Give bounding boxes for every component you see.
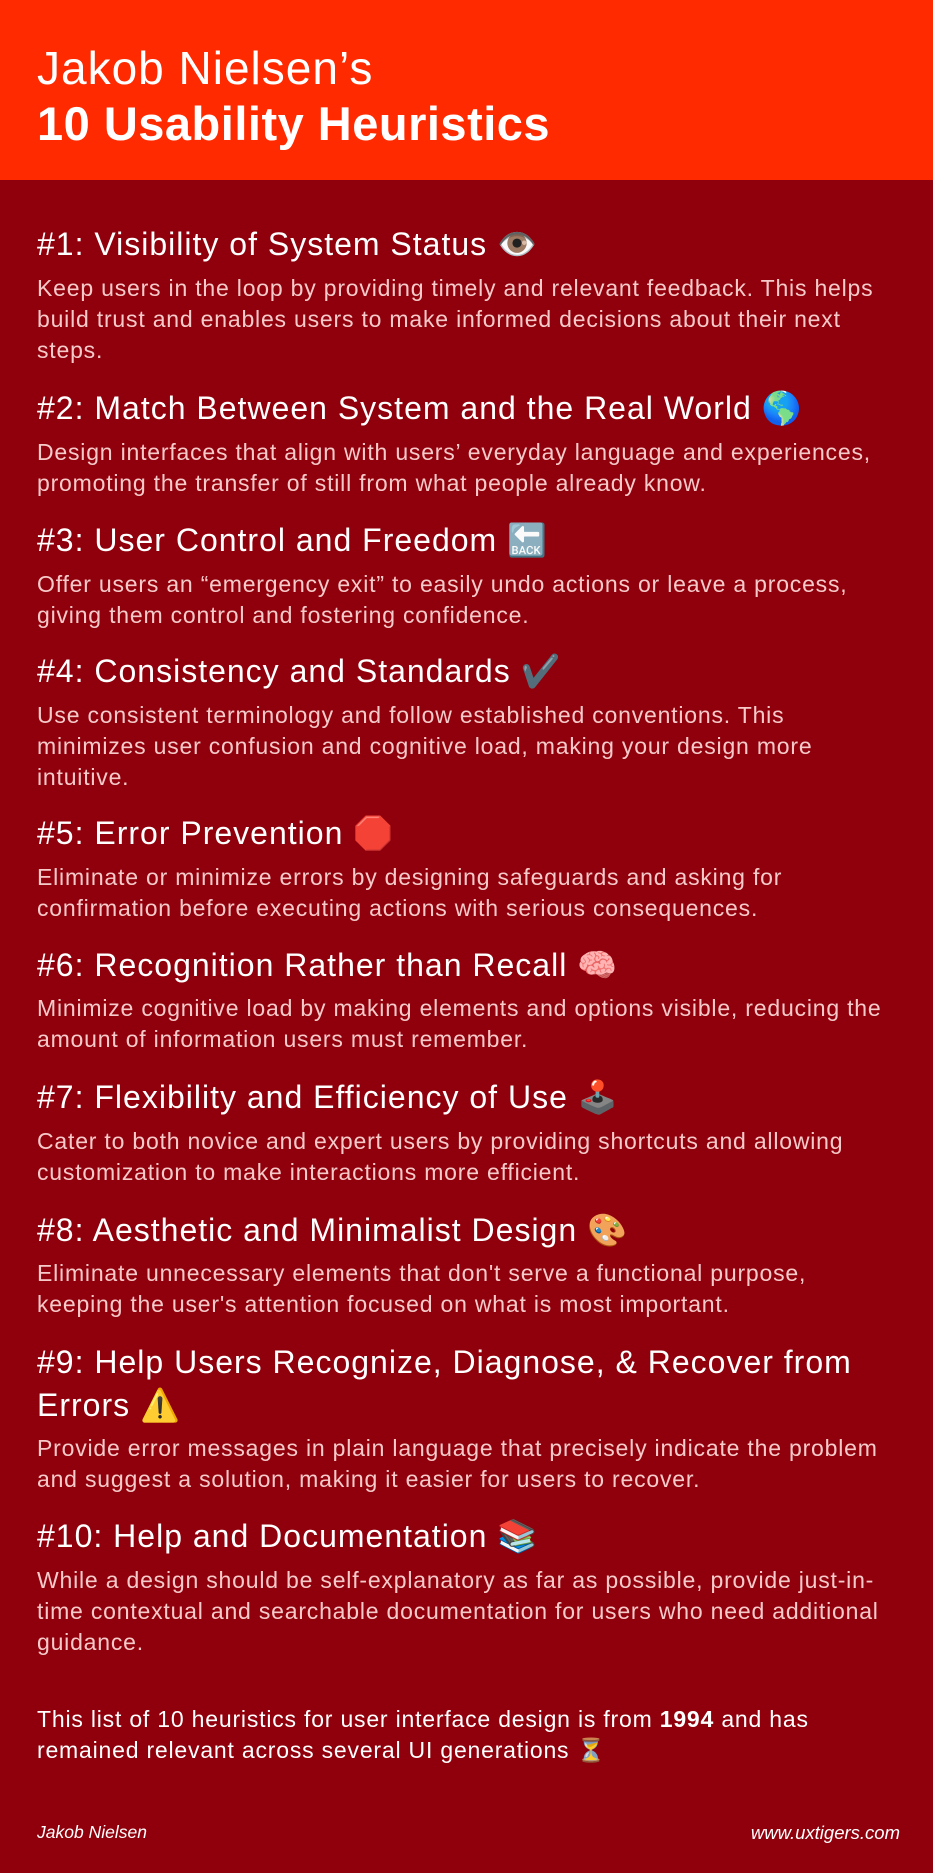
heuristic 4 (37, 653, 812, 790)
heuristic 1: build trust and enables users to make informed decisions about their next (37, 306, 841, 332)
heuristic 10: guidance. (37, 1629, 144, 1655)
heuristic 5 (37, 815, 782, 921)
heuristic 6: Minimize cognitive load by making elements and options visible, reducing the (37, 995, 882, 1021)
heuristic 1: steps. (37, 337, 103, 363)
heuristic 10 (37, 1518, 879, 1655)
footnote: This list of 10 heuristics for user interface design is from 1994 and has (37, 1706, 809, 1732)
heuristic 7: #7: Flexibility and Efficiency of Use 🕹️ (37, 1079, 619, 1115)
heuristic 10: time contextual and searchable documentation for users who need additional (37, 1598, 879, 1624)
heuristic 7: customization to make interactions more efficient. (37, 1159, 580, 1185)
heuristic 7 (37, 1079, 843, 1185)
heuristic 3: Offer users an “emergency exit” to easily undo actions or leave a process, (37, 571, 847, 597)
heuristic 8: keeping the user's attention focused on what is most important. (37, 1291, 730, 1317)
heuristic 5: #5: Error Prevention 🛑 (37, 815, 394, 851)
heuristic 3: giving them control and fostering confidence. (37, 602, 529, 628)
heuristic 1: #1: Visibility of System Status 👁️ (37, 226, 538, 262)
heuristic 10: While a design should be self-explanatory as far as possible, provide just-in- (37, 1567, 874, 1593)
heuristic 2: #2: Match Between System and the Real World 🌎 (37, 390, 802, 426)
heuristic 8: Eliminate unnecessary elements that don't serve a functional purpose, (37, 1260, 806, 1286)
heuristic 4: minimizes user confusion and cognitive load, making your design more (37, 733, 812, 759)
heuristic 6 (37, 947, 882, 1052)
title line 2: 10 Usability Heuristics (37, 97, 550, 150)
heuristic 1: Keep users in the loop by providing timely and relevant feedback. This helps (37, 275, 873, 301)
title line 1: Jakob Nielsen’s (37, 42, 373, 94)
heuristic 6: #6: Recognition Rather than Recall 🧠 (37, 947, 618, 983)
heuristic 5: confirmation before executing actions with serious consequences. (37, 895, 758, 921)
heuristic 6: amount of information users must remember. (37, 1026, 528, 1052)
heuristic 5: Eliminate or minimize errors by designing safeguards and asking for (37, 864, 782, 890)
credit: author: Jakob Nielsen (37, 1822, 147, 1842)
heuristic 8 (37, 1212, 806, 1317)
heuristic 9: Errors ⚠️ (37, 1387, 181, 1423)
heuristic 3 (37, 522, 847, 628)
heuristic 9: #9: Help Users Recognize, Diagnose, & Recover from (37, 1344, 852, 1380)
heuristic 9: Provide error messages in plain language that precisely indicate the problem (37, 1435, 878, 1461)
heuristic 3: #3: User Control and Freedom 🔙 (37, 522, 548, 558)
heuristic 4: #4: Consistency and Standards ✔️ (37, 653, 561, 689)
header banner (0, 0, 933, 180)
heuristic 2: promoting the transfer of still from what people already know. (37, 470, 707, 496)
heuristic 2 (37, 390, 871, 496)
heuristic 7: Cater to both novice and expert users by providing shortcuts and allowing (37, 1128, 843, 1154)
heuristic 4: Use consistent terminology and follow established conventions. This (37, 702, 784, 728)
heuristic 1 (37, 226, 873, 363)
credit: website: www.uxtigers.com (751, 1822, 900, 1843)
heuristic 9 (37, 1344, 878, 1492)
heuristic 4: intuitive. (37, 764, 129, 790)
footnote: remained relevant across several UI generations ⏳ (37, 1737, 606, 1763)
heuristic 2: Design interfaces that align with users’ everyday language and experiences, (37, 439, 871, 465)
footnote (37, 1706, 809, 1763)
heuristic 8: #8: Aesthetic and Minimalist Design 🎨 (37, 1212, 628, 1248)
heuristic 9: and suggest a solution, making it easier for users to recover. (37, 1466, 700, 1492)
heuristic 10: #10: Help and Documentation 📚 (37, 1518, 538, 1554)
